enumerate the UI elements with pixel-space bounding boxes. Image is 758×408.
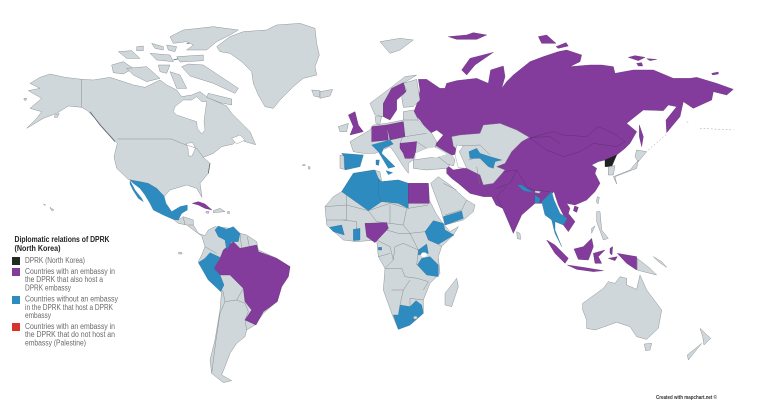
java xyxy=(567,265,603,272)
legend title: Diplomatic relations of DPRK xyxy=(14,235,110,244)
legend item: palestine: embassy (Palestine) xyxy=(25,338,86,348)
caspian sea xyxy=(455,145,467,168)
nigeria xyxy=(365,223,388,243)
russia china india iran xyxy=(413,50,733,233)
wrangel island xyxy=(712,72,718,75)
turkey xyxy=(413,157,453,170)
central and south america xyxy=(130,180,290,383)
new siberian islands xyxy=(628,56,657,66)
severnaya zemlya xyxy=(538,35,568,48)
taiwan xyxy=(596,197,599,204)
legend item: host only: in the DPRK that host a DPRK xyxy=(25,303,114,312)
legend item: palestine xyxy=(12,322,115,348)
legend item: mutual embassy: Countries with an embassy in xyxy=(25,267,115,276)
south and southeast asia oceania xyxy=(517,185,711,360)
cuba xyxy=(192,202,212,210)
lake victoria xyxy=(421,252,427,257)
egypt xyxy=(408,183,429,203)
africa and middle east xyxy=(325,170,475,329)
iceland xyxy=(320,89,333,98)
nepal xyxy=(517,185,533,193)
west papua xyxy=(617,253,637,270)
legend item: mutual embassy: the DPRK that also host a xyxy=(25,275,103,284)
romania bulgaria xyxy=(400,142,417,158)
japan xyxy=(613,150,647,184)
borneo xyxy=(574,238,593,260)
uzbekistan xyxy=(469,148,502,168)
mongolia border xyxy=(530,127,625,157)
norway xyxy=(370,75,417,117)
sumatra xyxy=(547,240,568,263)
tanzania xyxy=(417,257,438,277)
sweden xyxy=(383,83,406,120)
spain xyxy=(342,153,363,170)
mexico xyxy=(130,180,187,220)
peru xyxy=(198,253,224,292)
sulawesi xyxy=(593,250,605,263)
legend item: mutual embassy: DPRK embassy xyxy=(25,284,71,292)
north korea xyxy=(605,155,617,167)
novaya zemlya xyxy=(462,52,493,75)
papua new guinea xyxy=(637,258,657,275)
uganda xyxy=(418,244,428,255)
madagascar xyxy=(445,278,458,307)
north america and greenland xyxy=(24,23,320,211)
venezuela xyxy=(215,226,240,250)
legend xyxy=(12,235,118,348)
legend item: host only xyxy=(12,294,118,320)
south africa xyxy=(393,301,423,329)
eurasia xyxy=(320,33,733,233)
italy austria xyxy=(372,140,395,168)
credit: Created with mapchart.net © xyxy=(656,394,717,401)
legend item: dprk: DPRK (North Korea) xyxy=(25,256,85,265)
svalbard xyxy=(380,38,413,53)
tasmania xyxy=(644,343,652,351)
philippines xyxy=(597,212,608,240)
germany xyxy=(372,125,388,142)
uk xyxy=(348,112,363,135)
legend item: palestine: the DPRK that do not host an xyxy=(25,330,115,339)
poland xyxy=(387,122,405,140)
finland xyxy=(402,79,420,107)
myanmar thailand malaya xyxy=(542,192,567,247)
legend title line 2: (North Korea) xyxy=(14,244,61,253)
franz josef land xyxy=(448,33,487,39)
equatorial guinea xyxy=(378,247,382,250)
ethiopia xyxy=(425,221,454,244)
arabia xyxy=(431,177,475,225)
legend item: host only: Countries without an embassy xyxy=(25,294,118,304)
algeria xyxy=(342,170,382,211)
brazil xyxy=(214,242,290,325)
legend item: palestine: Countries with an embassy in xyxy=(25,322,115,331)
australia xyxy=(583,275,662,339)
libya xyxy=(378,178,408,208)
central asia xyxy=(452,123,529,185)
south korea xyxy=(608,166,615,175)
guinea and sierra leone xyxy=(329,225,344,235)
baja california xyxy=(130,181,143,202)
legend item: host only: embassy xyxy=(25,311,51,320)
yemen xyxy=(443,211,463,225)
legend item: mutual embassy xyxy=(12,267,115,292)
ghana xyxy=(353,228,360,241)
bangladesh xyxy=(535,195,540,203)
new zealand xyxy=(700,328,711,345)
black sea xyxy=(415,147,447,157)
sakhalin xyxy=(639,125,643,147)
europe xyxy=(350,110,437,173)
sri lanka xyxy=(517,232,521,239)
